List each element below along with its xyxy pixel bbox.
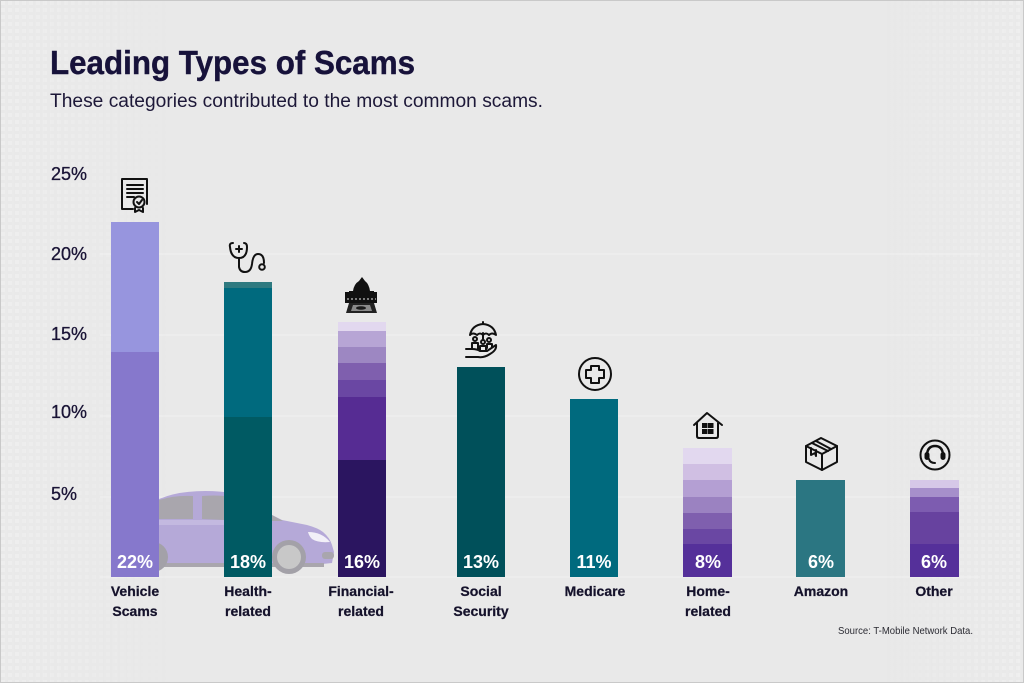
icon: umbrella over family in hand [466, 322, 496, 357]
category labels: related [338, 603, 384, 619]
category labels: Scams [112, 603, 158, 619]
bar: Health-related 18%: 18% [230, 552, 266, 572]
icon: package box [806, 438, 837, 470]
y axis labels: 5% [51, 484, 77, 504]
icon: capitol building [345, 277, 377, 313]
bar: Social Security 13% [457, 367, 505, 577]
category labels: Amazon [794, 583, 848, 599]
category labels [111, 583, 953, 619]
bar: Home-related 8% [683, 448, 732, 577]
bar: Home-related 8%: 8% [695, 552, 721, 572]
y axis labels: 25% [51, 164, 87, 184]
category labels: related [225, 603, 271, 619]
category labels: Financial- [328, 583, 394, 599]
bar: Amazon 6% [796, 480, 845, 577]
bar: Financial-related 16%: 16% [344, 552, 380, 572]
icon: certificate [122, 179, 147, 212]
bar: Medicare 11%: 11% [576, 552, 612, 572]
category labels: Other [915, 583, 953, 599]
y axis labels: 10% [51, 402, 87, 422]
icon: headset [920, 440, 950, 470]
icon: medical cross [579, 358, 611, 390]
subtitle: These categories contributed to the most common scams. [50, 91, 543, 112]
bar: Vehicle Scams 22% [111, 222, 159, 577]
y axis labels: 20% [51, 244, 87, 264]
title: Leading Types of Scams [50, 44, 415, 81]
bar: Other 6% [910, 480, 959, 577]
y axis labels: 15% [51, 324, 87, 344]
icon: stethoscope [230, 243, 265, 272]
category labels: Health- [224, 583, 272, 599]
category labels: Social [460, 583, 502, 599]
source note: Source: T-Mobile Network Data. [838, 626, 973, 637]
bar: Other 6%: 6% [921, 552, 947, 572]
category labels: Vehicle [111, 583, 159, 599]
category labels: Home- [686, 583, 730, 599]
icon: house [694, 413, 722, 438]
category labels: Security [453, 603, 509, 619]
bar: Amazon 6%: 6% [808, 552, 834, 572]
category labels: Medicare [565, 583, 626, 599]
car illustration [138, 491, 334, 574]
bar: Medicare 11% [570, 399, 618, 577]
category labels: related [685, 603, 731, 619]
bar: Health-related 18% [224, 282, 272, 577]
bar: Financial-related 16% [338, 322, 386, 577]
bar: Vehicle Scams 22%: 22% [117, 552, 153, 572]
bar: Social Security 13%: 13% [463, 552, 499, 572]
y axis labels [51, 164, 87, 504]
